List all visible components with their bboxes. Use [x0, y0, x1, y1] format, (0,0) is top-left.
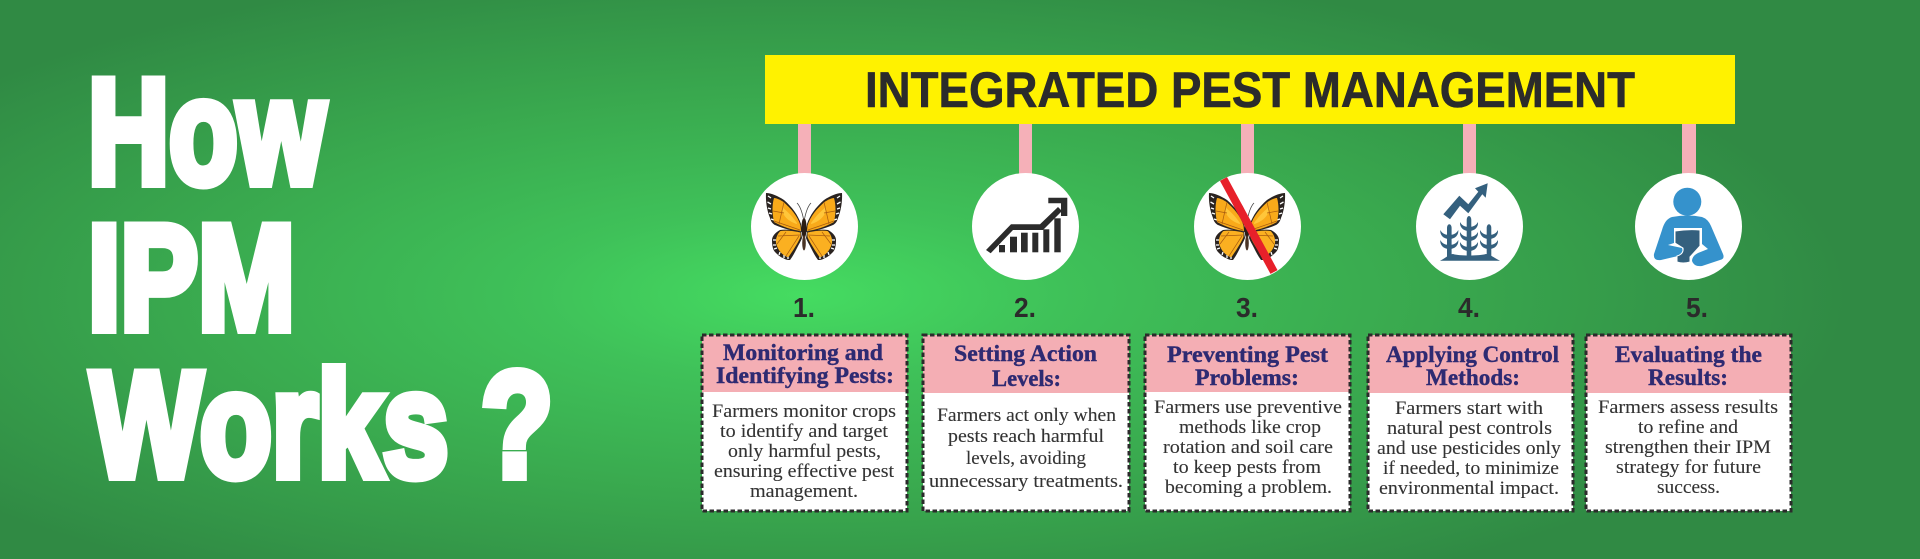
title: How IPM Works ?: Works ?: [91, 341, 553, 508]
panel: step 4 control methods: [1368, 335, 1573, 511]
body text: and use pesticides only: [1377, 438, 1562, 459]
heading: [716, 340, 894, 388]
body text: [712, 401, 896, 502]
body text: [929, 405, 1123, 492]
body text: [1598, 397, 1778, 498]
step number 1: 1.: [793, 292, 815, 323]
heading: Levels:: [992, 366, 1061, 391]
body text: ensuring effective pest: [714, 461, 895, 482]
title: How IPM Works ?: How: [88, 48, 326, 215]
icon: crops with rising arrow: [1416, 173, 1523, 280]
body text: unnecessary treatments.: [929, 471, 1123, 492]
panel: step 5 evaluating: [1586, 335, 1791, 511]
body text: only harmful pests,: [728, 441, 881, 462]
banner: Integrated Pest Management: INTEGRATED PEST MANAGEMENT: [865, 62, 1635, 118]
heading: Monitoring and: [723, 340, 883, 365]
body text: becoming a problem.: [1165, 477, 1332, 498]
heading: Setting Action: [954, 341, 1097, 366]
step number 4: 4.: [1458, 292, 1480, 323]
body text: environmental impact.: [1379, 478, 1559, 499]
icon: rising chart arrow: [972, 173, 1079, 280]
body text: Farmers assess results: [1598, 397, 1778, 418]
body text: levels, avoiding: [966, 448, 1086, 469]
step number 5: 5.: [1686, 292, 1708, 323]
body text: [1154, 397, 1342, 498]
icon: crossed-out butterfly: [1194, 173, 1301, 280]
body text: strategy for future: [1616, 457, 1761, 478]
step number 3: 3.: [1236, 292, 1258, 323]
body text: pests reach harmful: [948, 426, 1104, 447]
panel: step 1 monitoring: [702, 335, 907, 511]
icon: butterfly: [751, 173, 858, 280]
body text: rotation and soil care: [1163, 437, 1333, 458]
heading: Identifying Pests:: [716, 363, 894, 388]
body text: to keep pests from: [1173, 457, 1321, 478]
body text: strengthen their IPM: [1605, 437, 1771, 458]
body text: Farmers act only when: [937, 405, 1117, 426]
heading: [1167, 342, 1328, 390]
icon: person with tablet: [1635, 173, 1742, 280]
heading: Applying Control: [1386, 342, 1559, 367]
body text: success.: [1657, 477, 1720, 498]
heading: [954, 341, 1097, 391]
body text: Farmers start with: [1395, 398, 1544, 419]
heading: Problems:: [1195, 365, 1299, 390]
body text: if needed, to minimize: [1383, 458, 1559, 479]
body text: to identify and target: [720, 421, 889, 442]
panel: step 2 action levels: [923, 335, 1129, 511]
panel: step 3 preventing: [1145, 335, 1350, 511]
heading: [1386, 342, 1559, 390]
connector pegs: [798, 124, 1696, 174]
step number 2: 2.: [1014, 292, 1036, 323]
title: How IPM Works ?: IPM: [88, 194, 295, 361]
body text: [1377, 398, 1562, 499]
heading: Results:: [1648, 365, 1728, 390]
body text: management.: [750, 481, 858, 502]
body text: Farmers use preventive: [1154, 397, 1342, 418]
heading: [1615, 342, 1762, 390]
body text: Farmers monitor crops: [712, 401, 896, 422]
heading: Evaluating the: [1615, 342, 1762, 367]
body text: to refine and: [1638, 417, 1739, 438]
heading: Preventing Pest: [1167, 342, 1328, 367]
body text: natural pest controls: [1387, 418, 1552, 439]
body text: methods like crop: [1179, 417, 1321, 438]
title: How IPM Works ?: [88, 48, 553, 508]
heading: Methods:: [1426, 365, 1520, 390]
